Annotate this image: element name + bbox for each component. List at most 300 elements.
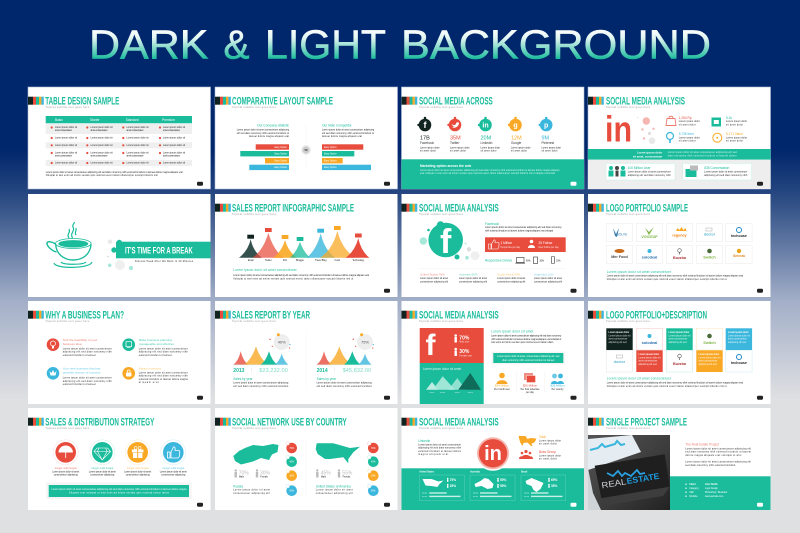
- facebook text: nibh euismod tincidunt ut laoreet dolore magna aliquam erat volutpat: [485, 229, 553, 232]
- chart: triangles: Food: [335, 260, 341, 262]
- country stats: consectetuer adipiscing elit: [420, 280, 448, 283]
- red stats box: [485, 237, 566, 252]
- russia stats: Lorem ipsum dolor sit amet: [233, 488, 270, 492]
- right column: laoreet dolore magna aliquam erat: [322, 135, 362, 138]
- chart: 2013: Lorem ipsum dolor sit amet consectetuer adipiscing: [233, 382, 289, 385]
- text block: Lorem ipsum dolor sit amet consectetuer: [233, 268, 298, 272]
- table: Lorem ipsum dolor sit: [55, 144, 77, 147]
- usa stats: [316, 469, 353, 495]
- table: Lorem ipsum dolor sit: [126, 162, 149, 165]
- portfolio grid: Lorem ipsum dolor sit: [698, 356, 721, 359]
- table: amet consectetuer: [90, 154, 108, 158]
- text block: Lorem ipsum dolor sit amet consectetuer adipiscing elit sed diam nonummy nibh euismod tincidunt ut laoreet dolore magna aliquam erat: [607, 382, 743, 385]
- left column: Our Company Statistic: [257, 124, 289, 128]
- social stats: Google: [511, 141, 522, 145]
- portfolio grid: adipiscing elit sed: [608, 341, 627, 344]
- photo: real estate business cards: ESTATE: [626, 471, 660, 486]
- captions: consectetuer adipiscing: [90, 474, 115, 477]
- logo grid: VOICEUP: [641, 235, 658, 239]
- social stats: f: [424, 120, 428, 130]
- teal chart panel: 2014: [468, 392, 474, 394]
- panel: social media analysis facebook: Topical subtitle text goes here: [419, 212, 463, 216]
- heading: SOCIAL MEDIA ANALYSIS: [419, 417, 499, 429]
- icon: world map: [518, 436, 536, 446]
- logo grid: Switch: [703, 254, 716, 260]
- banner: [111, 240, 210, 263]
- stat items: sit amet dolor: [726, 140, 743, 143]
- panel: social media analysis mixed: Topical subtitle text goes here: [419, 319, 463, 323]
- title: DARK: [89, 22, 208, 68]
- project description: The Real Estate Project: [685, 442, 719, 446]
- panel: table design sample: Topical subtitle text goes here: [45, 105, 90, 109]
- icon: logo: [757, 396, 763, 400]
- teal block: John Smith: [705, 483, 718, 486]
- icon: facebook bubble: [420, 221, 480, 261]
- panel: why a business plan: [28, 301, 210, 404]
- text block: Lorem ipsum dolor sit amet consectetuer: [607, 376, 672, 380]
- logo grid: Mer Food: [611, 255, 629, 259]
- percent badges left: 30%: [289, 476, 294, 478]
- portfolio grid: amet consectetuer: [698, 360, 718, 363]
- captions: Lorem ipsum dolor sit amet: [89, 470, 116, 473]
- captions: Integer nulla feugiat: [91, 467, 114, 470]
- captions: consectetuer adipiscing: [126, 474, 150, 477]
- red facebook panel: f: [426, 329, 436, 362]
- logo grid: techouse: [731, 234, 747, 238]
- text: boss group: Lorem ipsum dolor: [539, 454, 561, 457]
- item: feasibility: adipiscing elit sed diam nonummy nibh: [63, 351, 112, 354]
- chart: triangles: Film: [283, 260, 287, 262]
- card: conversation: adipiscing elit sed diam nonummy nibh: [704, 174, 748, 177]
- card: users: 100 Million User: [628, 166, 651, 170]
- red stats box: New Follow per day: [538, 246, 560, 249]
- social stats: 17B: [420, 135, 430, 141]
- table: Lorem ipsum dolor sit: [163, 162, 185, 165]
- red facebook panel: Female user: [459, 354, 472, 357]
- heading: COMPARATIVE LAYOUT SAMPLE: [232, 96, 333, 108]
- percent badges right: 76%: [371, 448, 376, 450]
- portfolio grid: Lorem ipsum dolor: [698, 354, 719, 356]
- linkedin text: [418, 439, 462, 456]
- stat items: 5,735 Item: [679, 132, 694, 136]
- panel: united states: [419, 471, 464, 501]
- item: chance of success: possible chance of success: [63, 370, 101, 374]
- percent badges right: 40%: [371, 462, 376, 464]
- portfolio grid: Lorem ipsum dolor sit: [608, 334, 631, 337]
- social stats: p: [544, 122, 548, 130]
- heading: SOCIAL NETWORK USE BY COUNTRY: [232, 417, 347, 429]
- table: Lorem ipsum dolor sit: [126, 151, 149, 154]
- country stats: Lorem ipsum dolor sit amet: [534, 277, 562, 280]
- portfolio grid: Lorem ipsum dolor: [638, 354, 659, 356]
- teal band: Lorem ipsum dolor sit amet consectetuer adipiscing elit sed diam nonummy nibh euismod tincidunt ut laoreet dolore magna aliquam: [420, 169, 560, 172]
- social stats: sit amet dolor: [480, 150, 497, 153]
- chart: 2013: 40%: [278, 340, 286, 344]
- linkedin text: euismod tincidunt ut laoreet dolore: [418, 450, 462, 453]
- social stats: Lorem ipsum dolor: [542, 146, 561, 149]
- text block: Lorem ipsum dolor sit amet consectetuer adipiscing elit sed diam nonummy nibh euismod tincidunt ut laoreet dolore magna aliquam erat: [46, 171, 183, 174]
- logo grid: solodeal: [642, 254, 657, 260]
- icon: linkedin badge: [476, 436, 510, 471]
- table: Lorem ipsum dolor sit: [163, 144, 185, 147]
- icon: group: [519, 450, 533, 459]
- portfolio grid: adipiscing elit sed: [698, 363, 717, 366]
- chart: triangles: [239, 226, 369, 262]
- social stats: 9M: [542, 135, 550, 141]
- chart: 2014: 75%: [361, 340, 369, 344]
- panel: united states: 2014: [422, 496, 428, 498]
- icon: logo: [384, 289, 390, 293]
- chart: triangles: Technology: [352, 260, 365, 262]
- chart: triangles: Blogger: [296, 259, 304, 262]
- table: amet consectetuer: [90, 129, 108, 132]
- stat items: sit amet dolor: [679, 140, 696, 143]
- item: investors: aliquam erat: [139, 381, 159, 384]
- table: Lorem ipsum dolor sit: [90, 151, 113, 154]
- captions: Integer nulla feugiat: [127, 467, 149, 470]
- panel: united states: 25%: [450, 484, 456, 488]
- teal band: Lorem ipsum dolor sit amet consectetuer adipiscing elit sed: [668, 151, 737, 154]
- callout: [46, 482, 192, 499]
- table: Lorem ipsum dolor sit: [55, 137, 77, 140]
- item: chance of success: adipiscing elit sed diam nonummy nibh: [63, 380, 112, 383]
- captions: Lorem ipsum dolor sit amet: [160, 470, 187, 473]
- table: Lorem ipsum dolor sit: [163, 126, 185, 129]
- item: manageable: manageable and effective: [139, 342, 174, 346]
- logo grid: [606, 223, 752, 264]
- stat icons: Per country: [552, 388, 564, 391]
- percent badges left: 40%: [289, 462, 294, 464]
- stat items: [666, 116, 747, 143]
- social stats: sit amet dolor: [450, 150, 466, 153]
- icon: logo: [757, 289, 763, 293]
- responsive device row: Responsive Device: [485, 258, 513, 262]
- russia stats: [233, 469, 271, 495]
- country stats: consectetuer adipiscing elit: [497, 280, 526, 283]
- panel: social media analysis facebook: [402, 194, 584, 297]
- portfolio grid: Lorem ipsum dolor sit: [728, 334, 750, 337]
- left column: Easy Option: [274, 160, 288, 162]
- panel: social media analysis linkedin: Topical subtitle text goes here: [419, 426, 463, 430]
- panel: sales report infographic: [215, 194, 398, 297]
- table: amet consectetuer: [163, 129, 180, 132]
- table: Basic: [55, 118, 63, 122]
- portfolio grid: amet consectetuer: [728, 338, 747, 341]
- right column: [322, 124, 375, 170]
- decorative bubbles: [637, 117, 655, 144]
- teal block: Client: [689, 483, 696, 486]
- country stats: consectetuer adipiscing elit: [459, 280, 487, 283]
- portfolio grid: adipiscing elit sed: [638, 363, 657, 366]
- icon: linkedin logo: in: [605, 109, 632, 150]
- title: [89, 22, 711, 68]
- country stats: consectetuer adipiscing elit: [534, 280, 562, 283]
- table: Lorem ipsum dolor sit: [126, 126, 149, 129]
- item: chance of success: Lorem ipsum dolor sit amet consectetuer: [63, 376, 112, 380]
- panel: logo portfolio sample: [588, 194, 770, 297]
- table: Standard: [126, 118, 139, 122]
- text block: [607, 270, 743, 281]
- russia stats: Female: [260, 476, 269, 478]
- title: BACKGROUND: [401, 22, 711, 68]
- percent badges right: 30%: [371, 476, 376, 478]
- title: LIGHT: [265, 22, 386, 68]
- text block: Lorem ipsum dolor sit amet consectetuer adipiscing elit sed diam nonummy: [491, 335, 562, 338]
- social stats: 35M: [450, 135, 461, 141]
- country stats: Lorem ipsum dolor sit amet: [497, 277, 526, 280]
- panel: social media analysis linkedin stats: Topical subtitle text goes here: [606, 105, 650, 109]
- table: Lorem ipsum dolor sit: [55, 151, 77, 154]
- icon: logo: [570, 503, 576, 507]
- text block: nibh euismod tincidunt ut laoreet dolore magna aliquam erat volutpat ut: [491, 338, 562, 341]
- stat icons: per day: [526, 391, 535, 394]
- panel: sales and distribution strategy: [28, 408, 210, 510]
- portfolio grid: Lorem ipsum dolor: [668, 332, 689, 334]
- project description: sed diam nonummy nibh euismod tincidunt ut laoreet: [685, 451, 751, 454]
- chart: 2014: 2014: [317, 368, 328, 374]
- stat icons: $50 Million: [523, 384, 538, 388]
- chart: 2014: Lorem ipsum dolor sit amet consectetuer adipiscing: [317, 382, 372, 385]
- left column: [237, 124, 290, 170]
- usa stats: United States of America: [316, 484, 351, 488]
- panel: brazil: 65%: [551, 478, 558, 482]
- captions: [52, 467, 187, 477]
- icon: logo: [197, 182, 203, 186]
- left column: laoreet dolore magna aliquam erat: [249, 135, 289, 138]
- stat icons: $34 Million: [495, 384, 510, 388]
- percent badges right: [368, 442, 379, 496]
- social stats: Lorem ipsum dolor: [480, 146, 500, 149]
- russia stats: consectetuer adipiscing elit: [233, 492, 270, 495]
- social stats: sit amet dolor: [420, 150, 436, 153]
- linkedin text: Linkedin: [418, 439, 430, 443]
- panel: why a business plan: Topical subtitle text goes here: [45, 319, 90, 323]
- teal band: sit amet, consectetuer: [633, 154, 663, 158]
- panel: comparative layout sample: Topical subtitle text goes here: [232, 105, 276, 109]
- portfolio grid: Lorem ipsum dolor: [728, 332, 749, 334]
- left column: Lorem ipsum dolor sit amet consectetuer adipiscing: [237, 129, 290, 132]
- social stats: Lorem ipsum dolor: [511, 146, 531, 149]
- table: [46, 116, 192, 166]
- teal band: diam nonummy nibh euismod tincidunt ut laoreet dolore: [668, 154, 737, 158]
- panel: united states: United States: [419, 471, 435, 474]
- left column: elit sed diam nonummy nibh euismod tincidunt ut: [237, 132, 289, 135]
- table: Lorem ipsum dolor sit: [90, 144, 113, 147]
- responsive device row: [485, 256, 561, 264]
- item: feasibility: Test the feasibility of your: [63, 338, 97, 342]
- russia stats: 70%: [239, 471, 249, 477]
- logo grid: SOLVE: [617, 232, 627, 236]
- stat items: 5.1k: [726, 116, 732, 120]
- heading: TABLE DESIGN SAMPLE: [45, 96, 119, 108]
- social stats: Lorem ipsum dolor: [420, 146, 440, 149]
- panel: social media analysis linkedin stats: [588, 87, 770, 189]
- red stats box: 25 Follow: [538, 241, 553, 245]
- icon: logo: [384, 182, 390, 186]
- teal band: [402, 468, 584, 510]
- heading: SOCIAL MEDIA ANALYSIS: [419, 310, 499, 322]
- facebook text: Lorem ipsum dolor sit amet consectetuer adipiscing elit sed diam nonummy: [485, 226, 562, 229]
- table: Lorem ipsum dolor sit: [90, 137, 113, 140]
- stat items: Lorem ipsum dolor: [726, 136, 747, 139]
- stat items: Lorem ipsum dolor: [679, 120, 700, 123]
- item: manageable: Make business planning: [139, 338, 172, 342]
- panel: sales report by year: [215, 301, 398, 404]
- stat icons: [494, 372, 565, 394]
- left column: Easy Option: [274, 146, 288, 149]
- heading: SOCIAL MEDIA ANALYSIS: [419, 203, 499, 215]
- teal chart panel: 2011: [430, 392, 435, 394]
- linkedin text: adipiscing elit sed diam nonummy nibh: [418, 447, 462, 450]
- chart: 2014: Sales by year: [317, 377, 337, 381]
- project description: Lorem ipsum dolor sit amet consectetuer adipiscing elit: [685, 461, 751, 464]
- usa stats: Female: [343, 476, 351, 478]
- red stats box: 1 Million: [500, 241, 512, 245]
- country stats: United States 76%: [420, 272, 445, 276]
- panel: brazil: 2014: [524, 496, 530, 498]
- teal band: [402, 159, 584, 189]
- social stats: 12M: [511, 135, 522, 141]
- social stats: in: [482, 122, 489, 130]
- panel: social media across: [402, 87, 584, 189]
- heading: LOGO PORTFOLIO SAMPLE: [606, 203, 688, 215]
- red stats box: People like per day: [500, 246, 521, 249]
- teal block: www.website.com: [705, 495, 723, 498]
- item: manageable: [122, 338, 188, 357]
- chart: 2013: Sales by year: [233, 377, 254, 381]
- teal band: [588, 149, 770, 160]
- item: investors: [122, 366, 188, 384]
- panel: logo portfolio with description: Topical subtitle text goes here: [606, 319, 650, 323]
- table: Starter: [90, 118, 101, 122]
- icon: versus badge: VS: [304, 150, 308, 152]
- country stats: Australia 69%: [459, 272, 478, 276]
- country stats: [420, 272, 562, 283]
- icon: thumbs up: [161, 440, 186, 465]
- stat icons: Per hour advertise: [521, 388, 540, 391]
- country stats: Lorem ipsum dolor sit amet: [459, 277, 487, 280]
- usa stats: 45%: [321, 471, 331, 477]
- text block: Lorem ipsum dolor sit amet: [491, 330, 533, 334]
- panel: brazil: 2012: [524, 493, 530, 495]
- teal block: Website: [689, 495, 698, 498]
- portfolio grid: amet consectetuer: [638, 360, 658, 363]
- captions: Integer nulla feugiat: [55, 467, 77, 470]
- country stats: Argentina 11%: [534, 272, 554, 276]
- table: Lorem ipsum dolor sit: [163, 137, 185, 140]
- table: amet consectetuer: [163, 154, 180, 158]
- chart: triangles: Email: [248, 260, 254, 262]
- teal chart panel: 2013: [455, 392, 461, 394]
- panel: brazil: 35%: [551, 484, 558, 488]
- usa stats: Lorem ipsum dolor sit amet: [316, 488, 353, 492]
- chart: 2013: 2013: [233, 368, 245, 374]
- right column: Our Main Competitor: [322, 124, 353, 128]
- stat items: sit amet dolor: [679, 123, 696, 126]
- project description: Lorem ipsum dolor sit amet consectetuer adipiscing elit: [685, 447, 751, 450]
- chart: 2014: elit sed diam nonummy nibh euismod tincidunt: [317, 385, 372, 388]
- panel: australia: Australia: [470, 471, 481, 474]
- table: amet consectetuer: [55, 154, 72, 158]
- portfolio grid: [606, 328, 752, 372]
- responsive device row: 60%: [526, 260, 531, 262]
- teal chart panel: 2012: [440, 392, 446, 394]
- banner: IT'S TIME FOR A BREAK: [125, 245, 193, 256]
- callout: Lorem ipsum dolor sit amet consectetuer adipiscing elit sed diam nonummy nibh euismod tincidunt ut laoreet dolore magna: [52, 488, 187, 491]
- portfolio grid: amet consectetuer: [608, 338, 628, 341]
- panel: sales report infographic: Topical subtitle text goes here: [232, 212, 276, 216]
- russia stats: Male: [239, 476, 245, 478]
- item: investors: euismod tincidunt ut laoreet dolore magna: [139, 378, 188, 381]
- heading: SOCIAL MEDIA ANALYSIS: [606, 96, 685, 108]
- stat items: Lorem ipsum dolor: [726, 120, 747, 123]
- panel: single project sample: Topical subtitle text goes here: [606, 426, 650, 430]
- teal band: Marketing option across the web: [420, 164, 471, 168]
- panel: logo portfolio sample: Topical subtitle text goes here: [606, 212, 650, 216]
- icon: logo: [384, 503, 390, 507]
- usa stats: consectetuer adipiscing elit: [316, 492, 353, 495]
- panel: brazil: Brazil: [521, 472, 528, 474]
- callout: Lorem ipsum dolor sit amet, consectetuer adipiscing elit, sed: [497, 355, 560, 358]
- panel: sales and distribution strategy: Topical subtitle text goes here: [45, 426, 90, 430]
- panel: australia: 50%: [500, 478, 507, 482]
- text block: [491, 330, 562, 344]
- panel: australia: 2012: [473, 493, 479, 495]
- captions: consectetuer adipiscing: [161, 474, 186, 477]
- red facebook panel: 70%: [459, 335, 470, 341]
- social stats: sit amet dolor: [542, 150, 558, 153]
- linkedin text: Lorem ipsum dolor sit amet consectetuer: [418, 443, 461, 446]
- panel: sales report by year: Topical subtitle text goes here: [232, 319, 276, 323]
- text block: wisi enim ad minim veniam quis nostrud exerci tation ullam: [491, 341, 553, 344]
- red facebook panel: 30%: [459, 349, 470, 355]
- panel: table design sample: [28, 87, 210, 189]
- card: conversation: [683, 163, 752, 180]
- facebook text: [485, 222, 562, 232]
- social stats: sit amet dolor: [511, 150, 527, 153]
- linkedin text: magna aliquam erat: [418, 453, 449, 456]
- card: conversation: 835 Conversation: [704, 166, 730, 170]
- portfolio grid: Lorem ipsum dolor sit: [638, 356, 661, 359]
- logo grid: doctor: [704, 232, 716, 236]
- map: usa: [316, 443, 360, 463]
- table: Lorem ipsum dolor sit: [126, 137, 149, 140]
- project description: dolore magna aliquam erat volutpat ut wisi: [685, 454, 742, 457]
- teal chart panel: Lorem ipsum dolor sit amet.: [423, 367, 462, 371]
- social stats: Twitter: [450, 141, 460, 145]
- heading: SALES REPORT INFOGRAPHIC SAMPLE: [232, 203, 354, 215]
- card: users: [606, 163, 675, 180]
- teal chart panel: [420, 363, 484, 404]
- decorative bubbles: [107, 240, 133, 270]
- item: feasibility: [47, 338, 112, 357]
- portfolio grid: adipiscing elit sed: [728, 341, 747, 344]
- portfolio grid: Lorem ipsum dolor: [608, 332, 629, 334]
- table: Lorem ipsum dolor sit: [126, 144, 149, 147]
- red facebook panel: [420, 328, 484, 363]
- social stats: Pinterest: [542, 141, 554, 145]
- social stats: Lorem ipsum dolor: [450, 146, 470, 149]
- item: chance of success: Your new business that fast: [63, 366, 101, 370]
- portfolio grid: doctor: [614, 360, 626, 364]
- stat items: sit amet dolor: [726, 123, 743, 126]
- table: Lorem ipsum dolor sit: [90, 162, 113, 165]
- card: conversation: Lorem ipsum dolor sit amet consectetuer: [704, 170, 748, 174]
- text: world: [539, 435, 561, 446]
- right column: Lorem ipsum dolor sit amet consectetuer adipiscing: [322, 129, 375, 132]
- teal band: erat volutpat ut wisi enim ad minim veniam quis nostrud exerci tation ullamcorper suscipit lobortis nisl ut aliquip commodo: [420, 172, 556, 175]
- left column: Easy Option: [274, 152, 288, 156]
